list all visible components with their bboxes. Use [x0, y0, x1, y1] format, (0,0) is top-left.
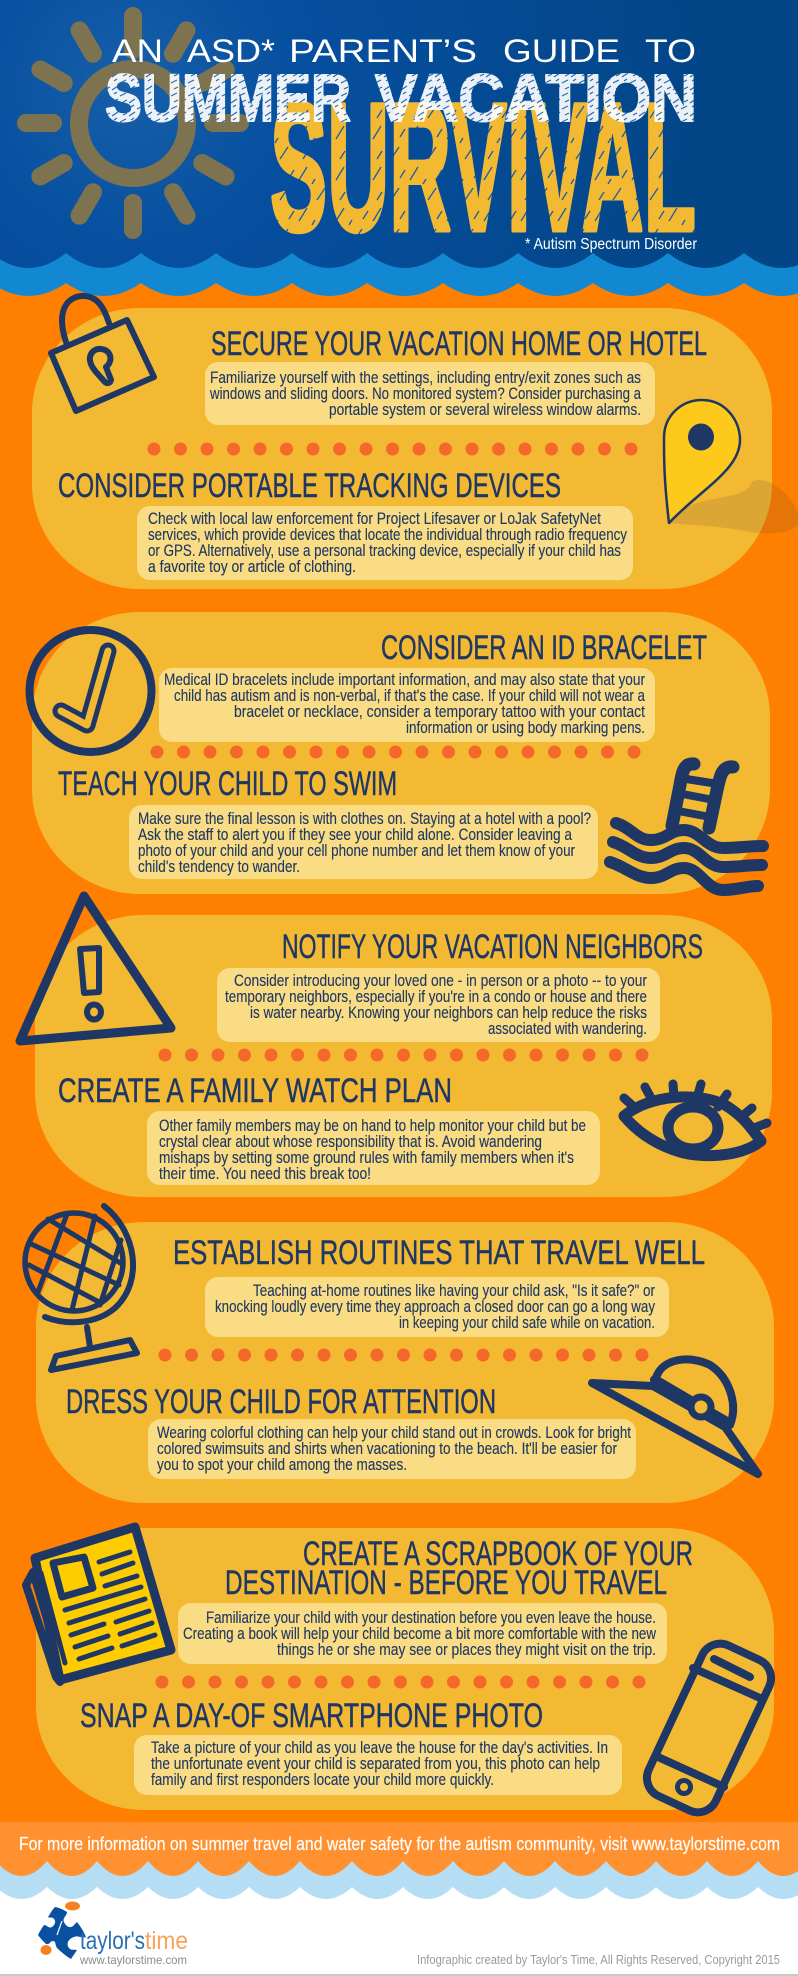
- text box: family plan: mishaps by setting some ground rules with family members when it's: [159, 1149, 574, 1167]
- heading: portable tracking: CONSIDER PORTABLE TRACKING DEVICES: [58, 467, 561, 505]
- text box: clothing: Wearing colorful clothing can help your child stand out in crowds. Look for bright: [157, 1424, 631, 1442]
- icon: puzzle piece: [38, 1902, 86, 1959]
- heading: dress for attention: DRESS YOUR CHILD FOR ATTENTION: [66, 1383, 496, 1421]
- text box: routines: knocking loudly every time they approach a closed door can go a long way: [215, 1298, 656, 1316]
- text box: clothing: colored swimsuits and shirts when vacationing to the beach. It'll be easier for: [157, 1440, 617, 1458]
- logo: taylor's time: [38, 1902, 188, 1967]
- title: guide line: GUIDE: [503, 33, 620, 69]
- text box: secure: windows and sliding doors. No monitored system? Consider purchasing a: [209, 385, 642, 403]
- footer: call to action band: [0, 1822, 798, 1876]
- text box: neighbors: associated with wandering.: [488, 1020, 647, 1038]
- panel background: [36, 1222, 774, 1503]
- text box: neighbors: [217, 968, 660, 1042]
- icon: smartphone: [640, 1637, 778, 1819]
- text box: smartphone photo: family and first responders locate your child more quickly.: [151, 1771, 494, 1789]
- title: summer vacation: [105, 61, 697, 136]
- text box: id bracelet: [159, 668, 655, 742]
- text box: family plan: crystal clear about whose responsibility that is. Avoid wandering: [159, 1133, 542, 1151]
- icon: globe: [25, 1206, 137, 1370]
- logo url: www.taylorstime.com: [79, 1953, 187, 1967]
- text box: routines: [205, 1277, 669, 1337]
- footer: light blue wave and white area: [0, 1850, 798, 1976]
- text box: scrapbook: Creating a book will help your child become a bit more comfortable with the new: [183, 1625, 656, 1643]
- dotted divider: [150, 746, 640, 758]
- wordmark: taylor's: [80, 1927, 145, 1955]
- panel background: [32, 308, 772, 589]
- text box: smartphone photo: the unfortunate event your child is separated from you, this photo can help: [151, 1755, 600, 1773]
- wordmark: time: [145, 1927, 188, 1955]
- text box: tracking: or GPS. Alternatively, use a personal tracking device, especially if your child has: [148, 542, 621, 560]
- dotted divider: [158, 1348, 648, 1362]
- heading: scrapbook: [225, 1535, 693, 1602]
- text box: swim: photo of your child and your cell phone number and let them know of your: [138, 842, 575, 860]
- panel background: [32, 612, 770, 894]
- text box: id bracelet: information or using body marking pens.: [406, 719, 645, 737]
- title: guide line: ASD*: [187, 33, 275, 69]
- text box: id bracelet: child has autism and is non-verbal, if that's the case. If your child will not wear a: [174, 687, 646, 705]
- icon: sun hat: [592, 1359, 758, 1474]
- text box: tracking: services, which provide devices that locate the individual through radio frequency: [148, 526, 628, 544]
- dotted divider: [148, 442, 638, 456]
- panel background: [36, 1528, 774, 1810]
- heading: teach swim: TEACH YOUR CHILD TO SWIM: [58, 765, 397, 803]
- text box: tracking: a favorite toy or article of clothing.: [148, 558, 356, 576]
- heading: family watch plan: CREATE A FAMILY WATCH PLAN: [58, 1072, 452, 1110]
- text box: secure: [205, 362, 655, 425]
- icon: sun: [26, 16, 240, 230]
- text box: smartphone photo: [134, 1735, 622, 1795]
- icon: check circle: [30, 630, 152, 752]
- icon: warning triangle: [20, 896, 171, 1041]
- text box: tracking: Check with local law enforcement for Project Lifesaver or LoJak SafetyNet: [148, 510, 601, 528]
- text box: swim: child's tendency to wander.: [138, 858, 300, 876]
- footnote: autism spectrum disorder: * Autism Spectrum Disorder: [525, 236, 697, 253]
- title: summer vacation: VACATION: [375, 61, 697, 136]
- title: guide line: AN: [112, 33, 163, 69]
- text box: secure: Familiarize yourself with the settings, including entry/exit zones such as: [210, 369, 641, 387]
- header: sky and waves: [0, 0, 798, 296]
- panel: id bracelet and swimming: [30, 612, 770, 894]
- text box: routines: Teaching at-home routines like having your child ask, "Is it safe?" or: [253, 1282, 655, 1300]
- text box: swim: Ask the staff to alert you if they see your child alone. Consider leaving a: [138, 826, 573, 844]
- title: guide line: TO: [645, 33, 696, 69]
- panel: routines and clothing: [25, 1206, 774, 1503]
- panel: scrapbook and smartphone photo: [26, 1527, 778, 1819]
- icon: newspaper: [26, 1527, 171, 1682]
- panel background: [35, 915, 772, 1197]
- text box: scrapbook: things he or she may see or places they might visit on the trip.: [277, 1641, 656, 1659]
- text box: id bracelet: Medical ID bracelets include important information, and may also state that your: [164, 671, 645, 689]
- text box: family plan: Other family members may be on hand to help monitor your child but be: [159, 1117, 586, 1135]
- text box: smartphone photo: Take a picture of your child as you leave the house for the day's activities. In: [151, 1739, 608, 1757]
- text box: neighbors: Consider introducing your loved one - in person or a photo -- to your: [234, 972, 647, 990]
- text box: secure: portable system or several wireless window alarms.: [329, 401, 641, 419]
- text box: neighbors: temporary neighbors, especially if you're in a condo or house and there: [225, 988, 647, 1006]
- text box: family plan: their time. You need this break too!: [159, 1165, 371, 1183]
- text box: id bracelet: bracelet or necklace, consider a temporary tattoo with your contact: [234, 703, 645, 721]
- icon: eye: [624, 1084, 767, 1156]
- panel: neighbors and family plan: [20, 896, 772, 1197]
- dotted divider: [156, 1676, 646, 1688]
- text box: tracking: [137, 506, 633, 580]
- icon: map pin: [664, 400, 798, 533]
- dotted divider: [158, 1048, 648, 1062]
- text box: neighbors: is water nearby. Knowing your neighbors can help reduce the risks: [250, 1004, 647, 1022]
- icon: pool ladder and waves: [610, 764, 763, 890]
- text box: clothing: [148, 1419, 636, 1479]
- title: guide line: [112, 33, 696, 69]
- text box: scrapbook: Familiarize your child with your destination before you even leave the house.: [206, 1609, 656, 1627]
- title: guide line: PARENT’S: [289, 33, 477, 69]
- icon: lock: [51, 296, 154, 411]
- panel: home security and tracking: [32, 296, 798, 589]
- heading: smartphone photo: SNAP A DAY-OF SMARTPHONE PHOTO: [80, 1697, 543, 1735]
- text box: family plan: [147, 1111, 600, 1185]
- text box: routines: in keeping your child safe while on vacation.: [399, 1314, 655, 1332]
- text box: swim: Make sure the final lesson is with clothes on. Staying at a hotel with a pool?: [138, 810, 591, 828]
- text box: clothing: you to spot your child among the masses.: [157, 1456, 407, 1474]
- text box: swim: [129, 805, 598, 879]
- text box: scrapbook: [178, 1603, 667, 1664]
- title: summer vacation: SUMMER: [105, 61, 351, 136]
